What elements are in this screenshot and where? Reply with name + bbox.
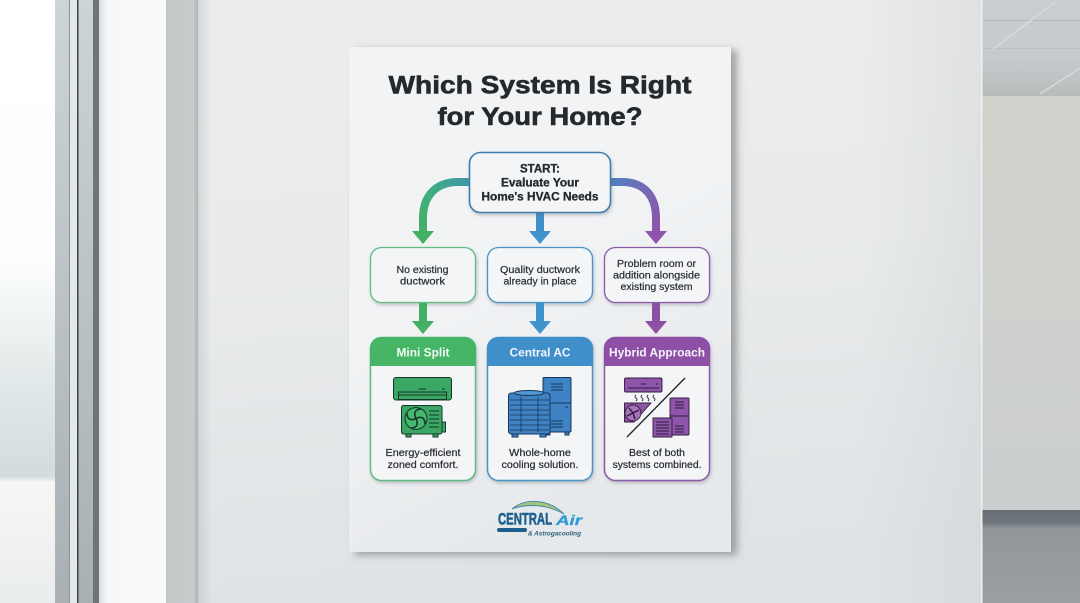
caption: central ac bbox=[502, 448, 578, 471]
condition: problem room: addition alongside bbox=[613, 270, 700, 282]
card header: hybrid approach: Hybrid Approach bbox=[609, 346, 705, 360]
caption: hybrid approach bbox=[612, 448, 702, 471]
title: Which System Is Right bbox=[388, 72, 692, 100]
start box: START: bbox=[520, 164, 560, 176]
caption: mini split: Energy-efficient bbox=[386, 448, 461, 459]
white wall strip bbox=[99, 0, 166, 603]
arrow: start to mini split bbox=[412, 182, 470, 244]
wall edge highlight bbox=[981, 0, 982, 603]
condition: quality ductwork: Quality ductwork bbox=[500, 265, 581, 276]
wall shading bbox=[198, 0, 982, 603]
arrow: start to central ac bbox=[529, 212, 551, 244]
caption: central ac: cooling solution. bbox=[502, 460, 578, 471]
arrow: purple down bbox=[645, 303, 667, 334]
logo: central air: CENTRAL bbox=[498, 510, 552, 528]
condition: problem room: Problem room or bbox=[617, 259, 697, 270]
icon: mini split units bbox=[394, 378, 452, 437]
start box: Home's HVAC Needs bbox=[482, 192, 598, 204]
start box: Evaluate Your bbox=[501, 178, 580, 190]
card: hybrid approach bbox=[604, 337, 710, 480]
room view on right bbox=[982, 0, 1080, 603]
condition: problem room bbox=[604, 248, 710, 302]
condition: problem room: existing system bbox=[620, 282, 692, 293]
condition: no existing ductwork: No existing bbox=[396, 265, 448, 276]
window on left bbox=[0, 0, 99, 603]
arrow: green down bbox=[412, 303, 434, 334]
icon: central ac units bbox=[508, 378, 571, 437]
arrow: start to hybrid bbox=[610, 182, 667, 244]
arrow: blue down bbox=[529, 303, 551, 334]
card: mini split bbox=[370, 337, 476, 480]
card header: central ac bbox=[487, 337, 593, 366]
caption: mini split: zoned comfort. bbox=[388, 460, 458, 471]
grey wall strip bbox=[166, 0, 198, 603]
icon: hybrid units bbox=[624, 378, 689, 437]
condition: no existing ductwork: ductwork bbox=[400, 276, 446, 288]
caption: hybrid approach: systems combined. bbox=[612, 460, 702, 471]
card header: hybrid approach bbox=[604, 337, 710, 366]
logo: central air: Air bbox=[555, 512, 584, 528]
condition: quality ductwork: already in place bbox=[504, 276, 577, 288]
card header: central ac: Central AC bbox=[510, 346, 571, 360]
caption: hybrid approach: Best of both bbox=[629, 448, 685, 459]
card header: mini split: Mini Split bbox=[396, 346, 450, 360]
caption: mini split bbox=[386, 448, 461, 471]
start box bbox=[470, 152, 610, 212]
logo swoosh bbox=[512, 501, 564, 514]
card: central ac bbox=[487, 337, 593, 480]
caption: central ac: Whole-home bbox=[509, 448, 571, 459]
poster bbox=[349, 47, 731, 552]
title bbox=[388, 72, 692, 131]
condition: no existing ductwork bbox=[370, 248, 476, 302]
title: for Your Home? bbox=[438, 103, 642, 131]
card header: mini split bbox=[370, 337, 476, 366]
condition: quality ductwork bbox=[488, 248, 592, 302]
icon: diagonal divider bbox=[627, 378, 685, 437]
logo: central air: & Astrogacooling bbox=[528, 530, 581, 538]
logo: central air bbox=[497, 501, 584, 538]
